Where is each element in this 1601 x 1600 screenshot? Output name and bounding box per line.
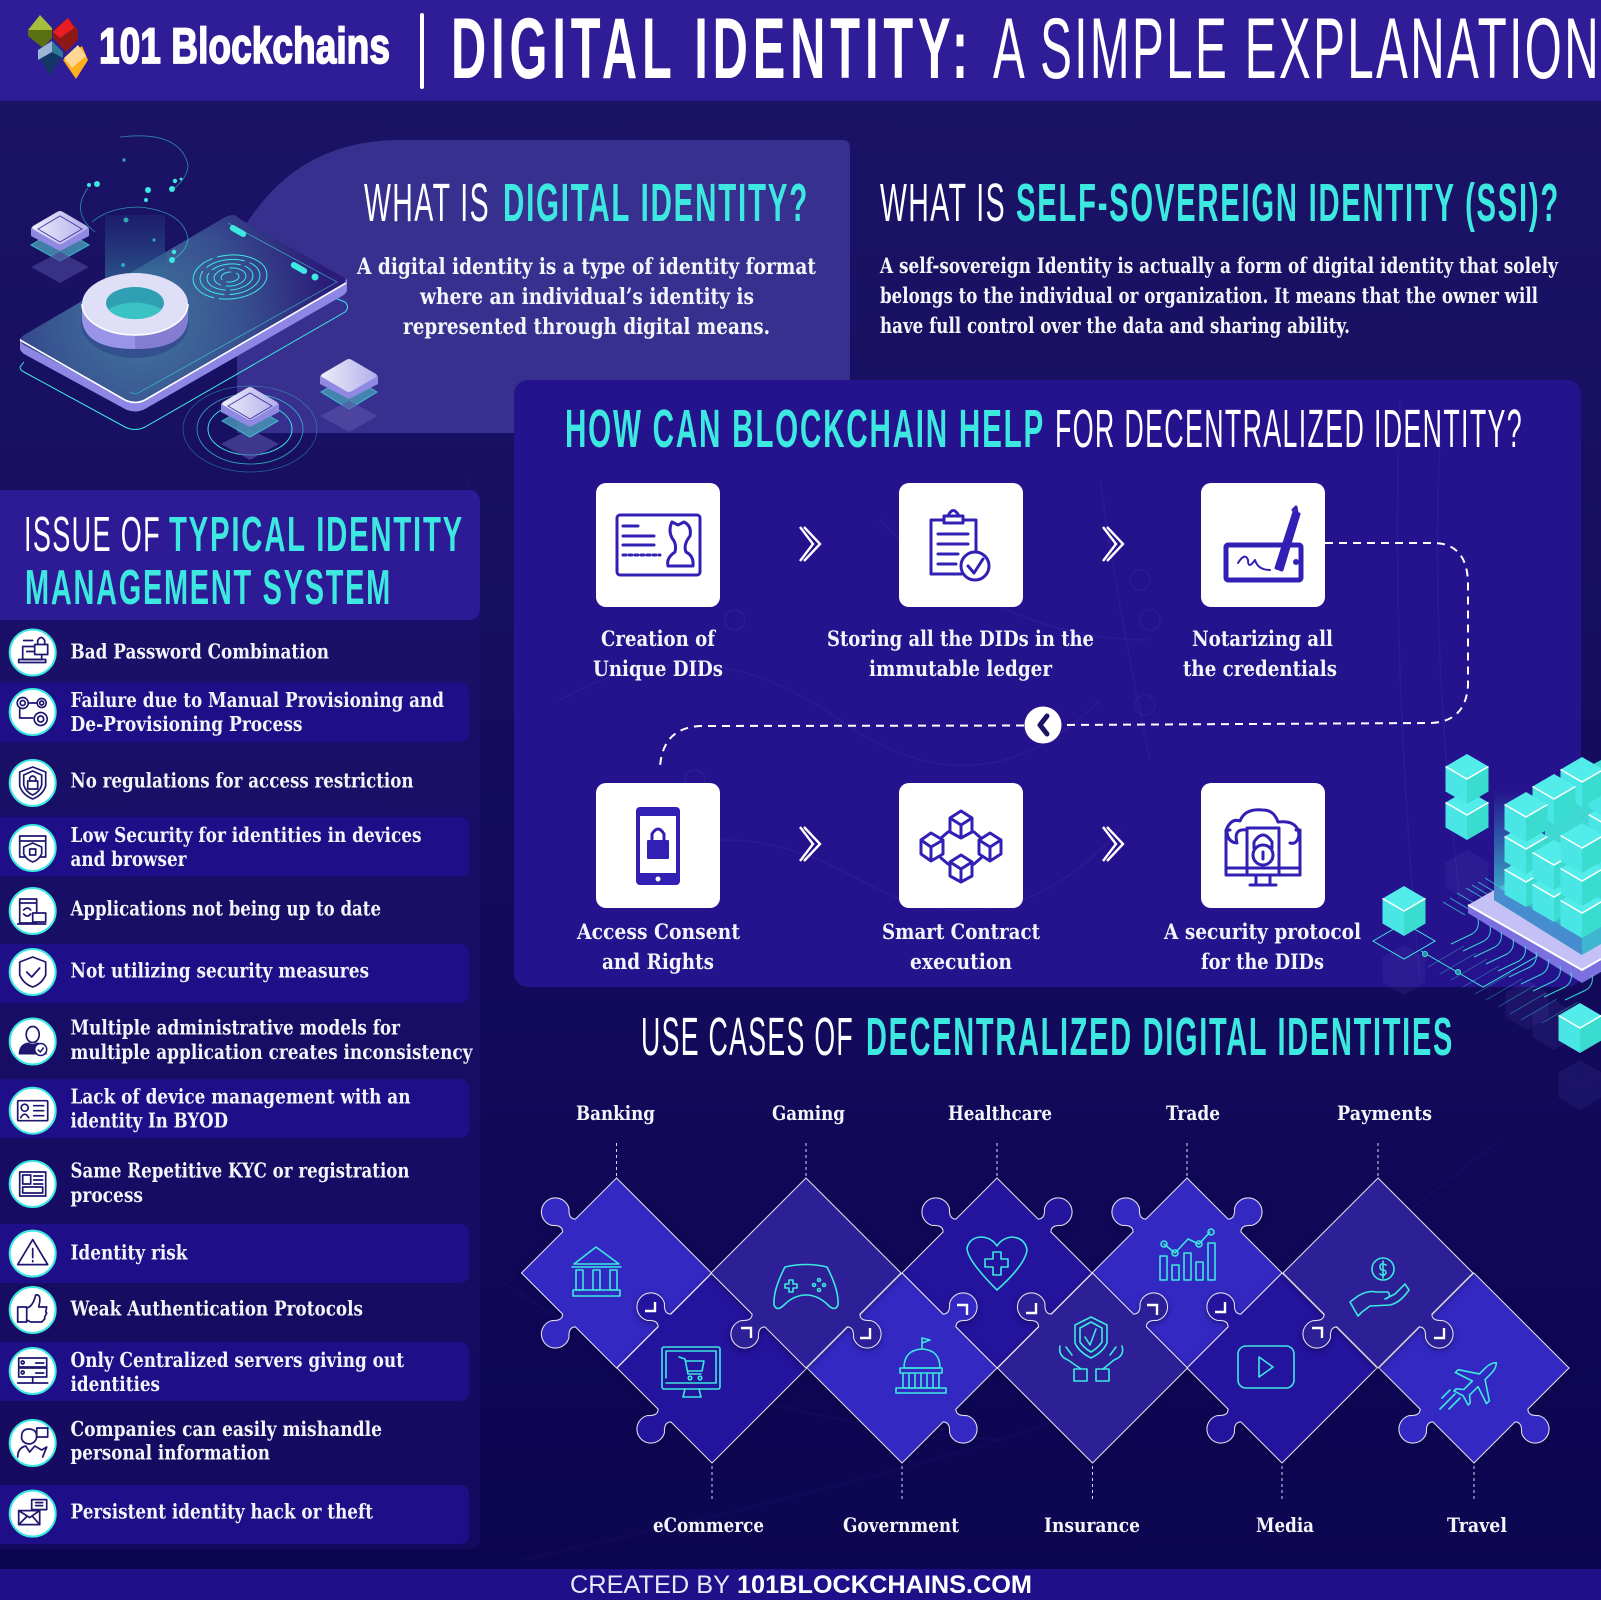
item: low security	[10, 823, 421, 871]
piece: government	[807, 1273, 997, 1463]
piece: travel	[1379, 1273, 1569, 1463]
block with rings	[183, 386, 317, 472]
label: Storing all the DIDs in the	[827, 627, 1094, 652]
decorative circuit lines	[0, 420, 1500, 1560]
icon: thumbs up	[10, 1287, 56, 1333]
item: identity risk	[10, 1231, 188, 1277]
block left	[31, 211, 89, 283]
text	[70, 688, 444, 736]
beam	[105, 215, 165, 300]
item: not utilizing security	[10, 949, 369, 995]
text: Failure due to Manual Provisioning and	[70, 688, 444, 712]
icon: growth chart	[1160, 1229, 1215, 1280]
text: De-Provisioning Process	[70, 712, 302, 736]
heading: TYPICAL IDENTITY	[169, 508, 464, 562]
puzzle labels top: Trade	[1166, 1102, 1220, 1125]
text: No regulations for access restriction	[70, 768, 414, 792]
icon: id card	[10, 1088, 56, 1134]
text: and browser	[70, 847, 187, 871]
orbit lines and dots	[80, 136, 188, 267]
text: Applications not being up to date	[70, 897, 381, 921]
icon: tablet signature	[1226, 507, 1301, 580]
ghost reflections	[1382, 850, 1601, 1110]
icon: monitor with cart	[662, 1347, 720, 1397]
text: Same Repetitive KYC or registration	[70, 1158, 410, 1182]
label: Access Consent	[576, 920, 740, 945]
puzzle use cases	[522, 1102, 1569, 1537]
heading: use cases	[641, 1007, 1454, 1067]
icon: warning	[10, 1231, 56, 1277]
row highlight strips	[0, 683, 469, 1544]
step: creation of unique DIDs	[593, 483, 723, 682]
divider	[420, 13, 424, 89]
icon: gears	[10, 689, 56, 735]
glow outline below phone	[20, 298, 348, 430]
text: Only Centralized servers giving out	[70, 1348, 404, 1372]
text: SSI description: have full control over the data and sharing ability.	[880, 313, 1350, 338]
puzzle labels bottom: Media	[1256, 1514, 1314, 1537]
upper comb lines	[1443, 878, 1500, 915]
icon: bank	[572, 1247, 621, 1296]
label: execution	[910, 950, 1012, 975]
icon: person check	[10, 1018, 56, 1064]
piece: healthcare	[902, 1178, 1092, 1368]
heading: what is SSI: WHAT IS	[880, 173, 1006, 233]
label: Unique DIDs	[593, 657, 723, 682]
text: Multiple administrative models for	[70, 1016, 401, 1040]
floating cubes	[1382, 754, 1601, 1053]
text: multiple application creates inconsistency	[70, 1040, 473, 1064]
label	[882, 920, 1040, 975]
footer text: 101BLOCKCHAINS.COM	[737, 1571, 1032, 1599]
label	[1163, 920, 1361, 975]
icon: heart plus	[967, 1237, 1027, 1290]
text: Persistent identity hack or theft	[70, 1500, 373, 1524]
logo wordmark: 101 Blockchains	[99, 18, 390, 74]
label: Notarizing all	[1192, 627, 1333, 652]
icon: shield lock	[10, 760, 56, 806]
item: manual provisioning	[10, 688, 444, 736]
label: immutable ledger	[869, 657, 1053, 682]
cube stacks	[1504, 757, 1601, 938]
piece: payments	[1283, 1178, 1473, 1368]
heading: MANAGEMENT SYSTEM	[25, 561, 392, 615]
item: mishandled information	[10, 1417, 382, 1466]
heading	[24, 508, 464, 615]
ring	[81, 273, 189, 358]
icon: play button	[1238, 1346, 1294, 1388]
text	[70, 823, 422, 871]
fingerprint	[191, 252, 269, 302]
item: bad password combination	[10, 630, 329, 676]
text: Low Security for identities in devices	[70, 823, 422, 847]
card	[899, 783, 1023, 908]
dashed leader lines	[616, 1143, 1474, 1501]
text: personal information	[70, 1441, 270, 1465]
item: centralized servers	[10, 1348, 404, 1396]
card	[899, 483, 1023, 607]
text	[70, 1016, 473, 1064]
step: security protocol	[1163, 783, 1361, 975]
panel: how can blockchain help	[514, 380, 1581, 987]
arrow	[1103, 827, 1123, 861]
text: Bad Password Combination	[70, 640, 329, 664]
puzzle labels top	[576, 1102, 1432, 1125]
item: applications not up to date	[10, 888, 381, 934]
text: digital identity description: represented through digital means.	[403, 314, 770, 340]
heading: HOW CAN BLOCKCHAIN HELP	[565, 399, 1045, 459]
chip platform	[1468, 790, 1601, 983]
card	[1201, 483, 1325, 607]
icon: game controller	[774, 1264, 838, 1308]
panel: issues of typical identity management system	[0, 490, 480, 1549]
label: the credentials	[1183, 657, 1337, 682]
icon: woman with speech	[10, 1420, 56, 1466]
piece: gaming	[711, 1178, 901, 1368]
item: device management	[10, 1085, 411, 1134]
item: multiple admin models	[10, 1016, 473, 1064]
heading: what is digital identity: WHAT IS	[364, 173, 490, 233]
icon: laptop lock	[10, 630, 56, 676]
label: Smart Contract	[882, 920, 1040, 945]
faint circuit traces	[560, 400, 1460, 980]
puzzle labels bottom: Travel	[1447, 1514, 1507, 1537]
text: Companies can easily mishandle	[70, 1417, 382, 1441]
piece: media	[1187, 1273, 1377, 1463]
footer text: CREATED BY	[570, 1571, 730, 1599]
puzzle labels top: Gaming	[772, 1102, 845, 1125]
logo cubes	[28, 15, 88, 79]
arrow	[1103, 527, 1123, 561]
icon: airplane	[1440, 1347, 1512, 1414]
text: digital identity description	[356, 254, 817, 340]
puzzle labels bottom: eCommerce	[653, 1514, 764, 1537]
item: weak authentication	[10, 1287, 363, 1333]
piece: trade	[1092, 1178, 1282, 1368]
card	[596, 483, 720, 607]
block right	[320, 359, 378, 432]
icon: shield check	[10, 949, 56, 995]
arrow	[800, 527, 820, 561]
item: repetitive KYC	[10, 1158, 410, 1207]
text	[70, 1085, 411, 1132]
heading panel	[0, 490, 480, 620]
text: Weak Authentication Protocols	[70, 1297, 363, 1321]
icon: capitol	[896, 1338, 946, 1393]
label: and Rights	[602, 950, 714, 975]
piece: ecommerce	[617, 1273, 807, 1463]
lower comb lines	[1428, 919, 1592, 1023]
text: identities	[70, 1372, 160, 1396]
heading: ISSUE OF	[24, 508, 161, 562]
icon: envelope	[10, 1491, 56, 1537]
puzzle labels top: Healthcare	[948, 1102, 1052, 1125]
heading: use cases: USE CASES OF	[641, 1007, 854, 1067]
label: A security protocol	[1163, 920, 1361, 945]
text	[70, 1158, 410, 1207]
icon: connected blocks	[921, 811, 1001, 882]
illustration: chip with cubes	[1373, 754, 1601, 1110]
heading: what is digital identity: DIGITAL IDENTITY?	[503, 173, 809, 233]
circuit line and diamond	[1373, 923, 1555, 987]
card	[1201, 783, 1325, 908]
label	[576, 920, 740, 975]
label	[1183, 627, 1337, 682]
icon: shield with hands	[1060, 1317, 1123, 1381]
heading: what is digital identity	[364, 173, 809, 233]
icon: id card	[617, 515, 700, 575]
step: storing DIDs	[827, 483, 1094, 682]
puzzle labels bottom: Government	[843, 1514, 959, 1537]
puzzle corner marks	[645, 1302, 1444, 1338]
icon: browser shield	[10, 825, 56, 871]
piece: insurance	[998, 1273, 1188, 1463]
step: notarizing credentials	[1183, 483, 1337, 682]
arrow	[800, 827, 820, 861]
puzzle labels top: Payments	[1337, 1102, 1432, 1125]
icon: window refresh	[10, 888, 56, 934]
puzzle labels bottom: Insurance	[1044, 1514, 1140, 1537]
label: Creation of	[601, 627, 716, 652]
piece: banking	[522, 1178, 712, 1368]
label	[593, 627, 723, 682]
text: Lack of device management with an	[70, 1085, 411, 1109]
phone body	[20, 215, 347, 412]
text: Identity risk	[70, 1241, 188, 1265]
logo: 101 Blockchains	[28, 15, 390, 79]
panel: what is digital identity background	[237, 140, 850, 433]
item: identity hack	[10, 1491, 373, 1537]
illustration: phone with fingerprint	[20, 136, 378, 472]
icon: cloud monitor lock	[1226, 810, 1300, 885]
footer text	[570, 1571, 1032, 1599]
text: identity In BYOD	[70, 1108, 228, 1132]
text: Not utilizing security measures	[70, 958, 369, 982]
label: for the DIDs	[1201, 950, 1324, 975]
card	[596, 783, 720, 908]
text	[70, 1417, 382, 1465]
step: smart contract	[882, 783, 1040, 975]
text: digital identity description: A digital identity is a type of identity format	[356, 254, 817, 280]
icon: servers	[10, 1348, 56, 1394]
flow bead arrow	[1024, 706, 1062, 744]
list background	[0, 600, 480, 1549]
title: DIGITAL IDENTITY:	[451, 1, 973, 97]
icon: clipboard with check	[931, 510, 989, 580]
footer bar	[0, 1569, 1601, 1600]
text: digital identity description: where an individual’s identity is	[419, 284, 754, 310]
puzzle labels top: Banking	[576, 1102, 655, 1125]
item: no regulations	[10, 760, 414, 806]
icon: phone with lock	[636, 807, 680, 885]
text	[70, 1348, 404, 1396]
text: SSI description	[879, 253, 1559, 338]
step: access consent and rights	[576, 783, 740, 975]
icon: hand with dollar	[1350, 1258, 1409, 1316]
phone slots	[229, 224, 318, 280]
dashed flow connector	[660, 543, 1468, 768]
header bar	[0, 0, 1601, 100]
text: process	[70, 1183, 143, 1207]
icon: form	[10, 1161, 56, 1207]
label	[827, 627, 1094, 682]
puzzle labels bottom	[653, 1514, 1507, 1537]
